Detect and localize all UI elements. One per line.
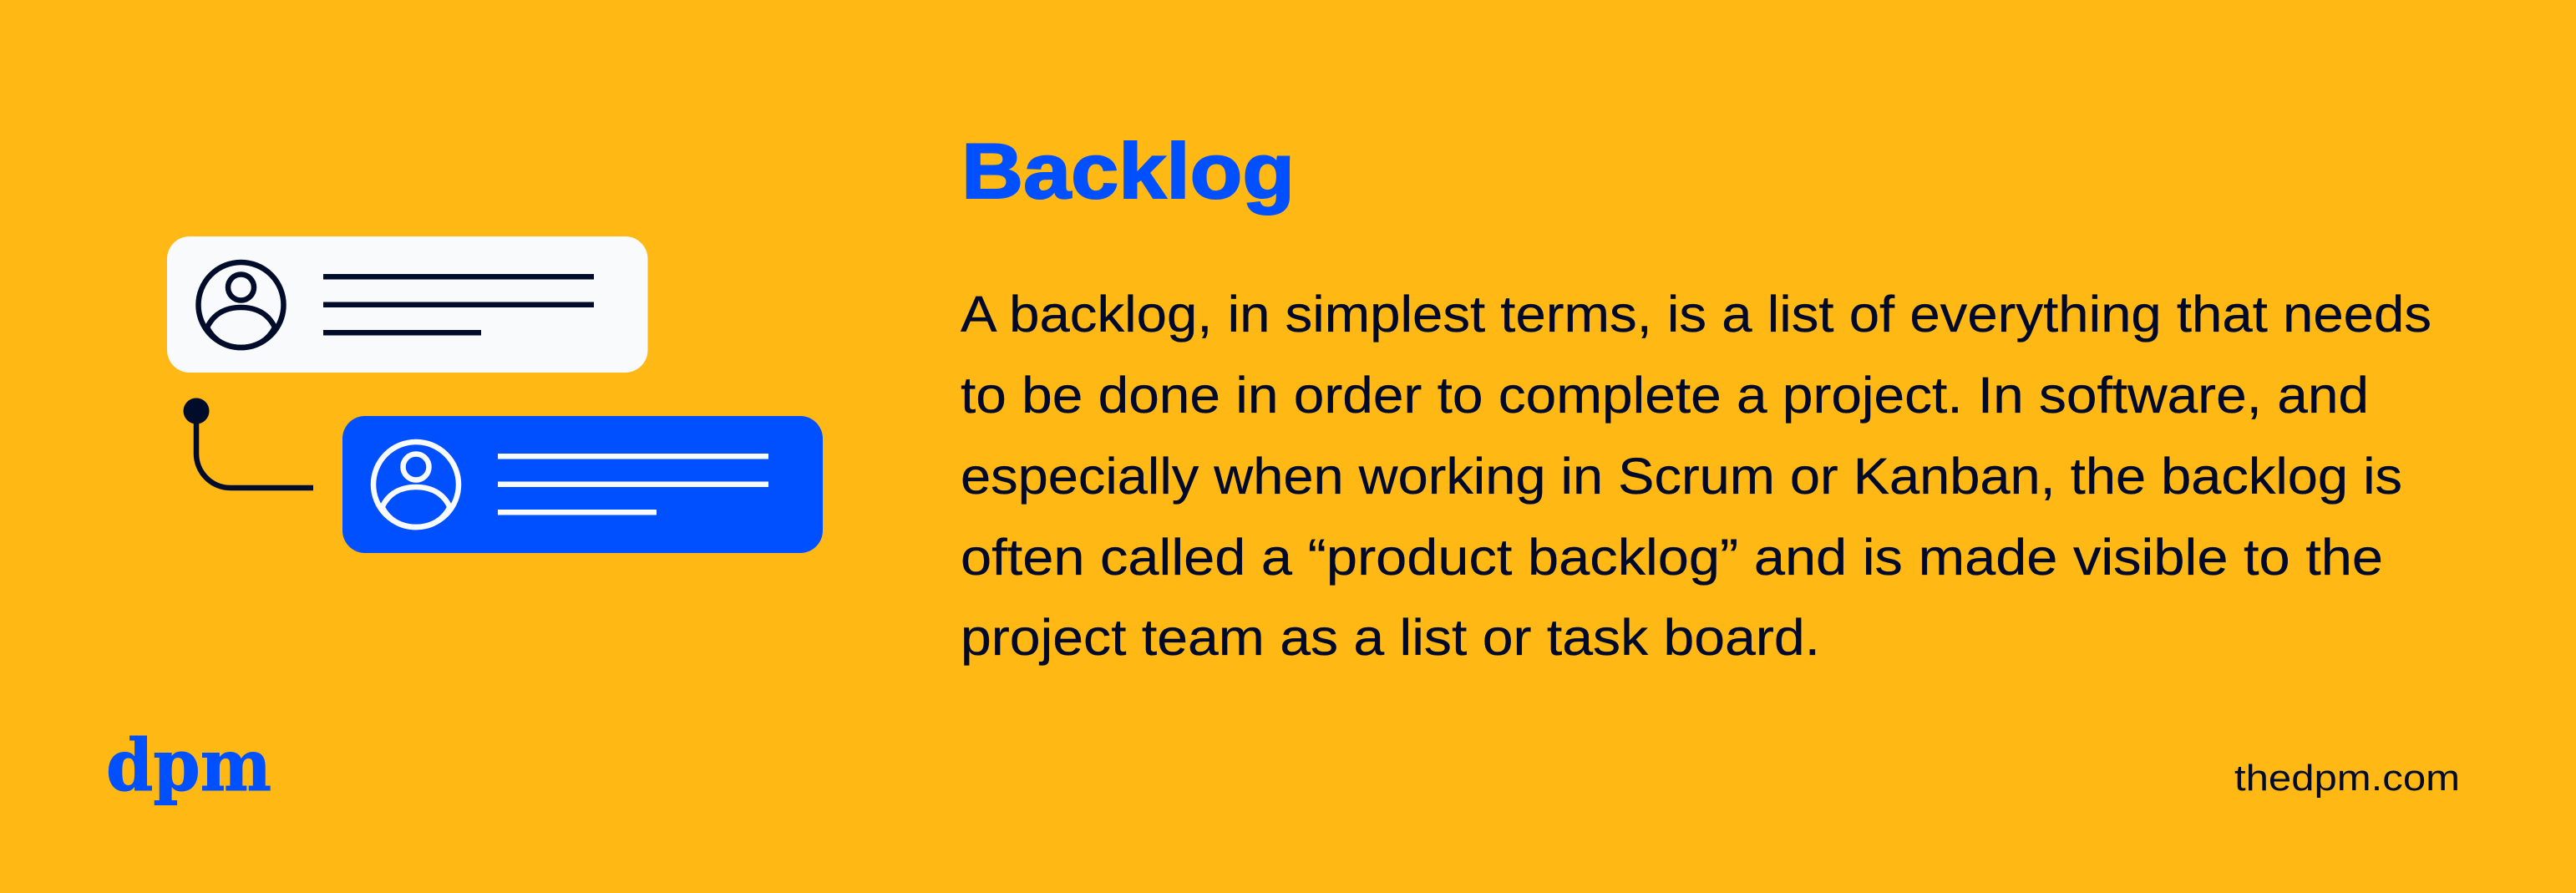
text placeholder lines xyxy=(323,274,594,336)
connector arrow between cards xyxy=(184,398,313,488)
logo: dpm: dpm xyxy=(106,724,271,808)
body text: especially when working in Scrum or Kanban, the backlog is xyxy=(961,448,2402,505)
panel: blue backlog card xyxy=(342,416,823,553)
website url: thedpm.com xyxy=(2234,758,2460,799)
body text: to be done in order to complete a project. In software, and xyxy=(961,367,2369,424)
body text xyxy=(961,286,2431,666)
panel: white backlog card xyxy=(167,236,648,373)
body text: A backlog, in simplest terms, is a list of everything that needs xyxy=(961,286,2431,342)
body text: often called a “product backlog” and is made visible to the xyxy=(961,529,2383,586)
title: Backlog xyxy=(961,127,1295,215)
icon: dark user avatar xyxy=(199,262,284,348)
illustration: backlog list cards xyxy=(167,236,823,553)
icon: white user avatar xyxy=(373,442,459,527)
body text: project team as a list or task board. xyxy=(961,609,1820,666)
text placeholder lines xyxy=(498,454,768,515)
